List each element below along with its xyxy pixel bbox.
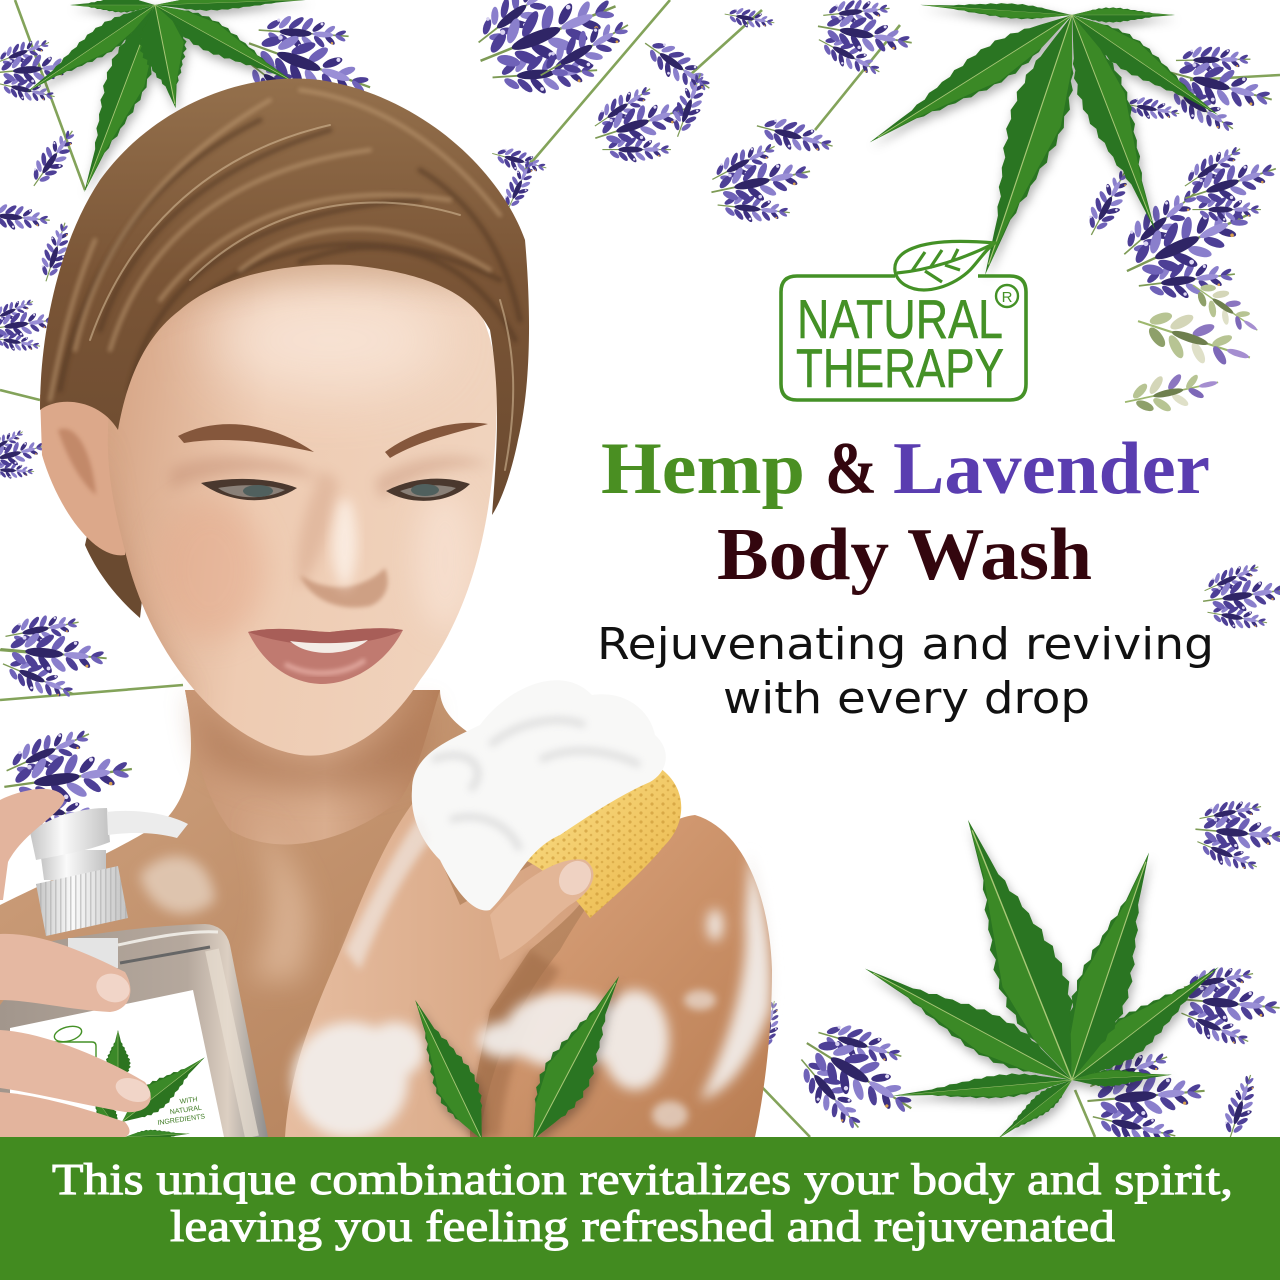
banner text: [52, 1155, 1233, 1251]
label caption: INGREDIENTS: [157, 1113, 206, 1127]
logo: Natural Therapy: [781, 241, 1026, 400]
product bottle: [0, 789, 268, 1143]
chest and neck: [0, 690, 620, 1137]
logo wordmark: THERAPY: [796, 337, 1004, 399]
sponge: [525, 768, 681, 918]
main heading: Lavender: [893, 428, 1210, 510]
logo registered mark: R: [1002, 289, 1013, 306]
pump neck: [40, 850, 106, 880]
hemp leaf: top left: [19, 0, 310, 200]
banner text: leaving you feeling refreshed and rejuvenated: [170, 1202, 1115, 1251]
label caption: NATURAL: [169, 1105, 202, 1116]
lips: [248, 628, 403, 684]
banner text: This unique combination revitalizes your body and spirit,: [52, 1155, 1233, 1204]
nose: [300, 568, 388, 608]
hemp leaf: top right: [859, 0, 1228, 284]
foam on arm and shoulder: [292, 815, 771, 1138]
logo wordmark: [796, 288, 1004, 399]
bottom banner: [0, 1137, 1280, 1280]
tagline: [597, 619, 1214, 724]
bottle label: [10, 990, 224, 1137]
woman: [0, 78, 772, 1138]
hand fingers: [0, 789, 65, 900]
main heading: [601, 428, 1210, 596]
tagline: with every drop: [723, 673, 1090, 724]
main heading: Hemp: [601, 428, 805, 510]
label hemp leaf: [82, 1030, 214, 1143]
main heading: Body Wash: [717, 514, 1092, 596]
front hair: [40, 78, 529, 515]
foam on sponge: [412, 680, 666, 910]
logo wordmark: NATURAL: [797, 288, 1003, 350]
bottle body: [0, 924, 268, 1137]
face shading: [100, 230, 500, 700]
label caption: WITH: [179, 1096, 198, 1106]
hair strands: [50, 90, 520, 470]
label caption: [155, 1096, 206, 1127]
eyebrows: [178, 424, 314, 452]
arm: [285, 800, 595, 1137]
fingers on sponge: [490, 859, 593, 960]
main heading: &: [825, 428, 877, 510]
pale lavender sprigs: [1121, 271, 1267, 422]
tagline: Rejuvenating and reviving: [597, 619, 1214, 670]
right shoulder: [480, 815, 772, 1137]
eyes: [201, 479, 297, 500]
logo leaf: [895, 241, 995, 290]
pump collar: [36, 866, 128, 936]
face: [108, 225, 497, 756]
ear: [40, 380, 135, 555]
label logo: [30, 1024, 96, 1060]
pump head: [30, 808, 110, 860]
hemp leaves over arm: [396, 965, 641, 1151]
hemp leaf: bottom right: [855, 807, 1231, 1147]
logo registered mark: [996, 285, 1018, 307]
back hair: [85, 500, 150, 618]
